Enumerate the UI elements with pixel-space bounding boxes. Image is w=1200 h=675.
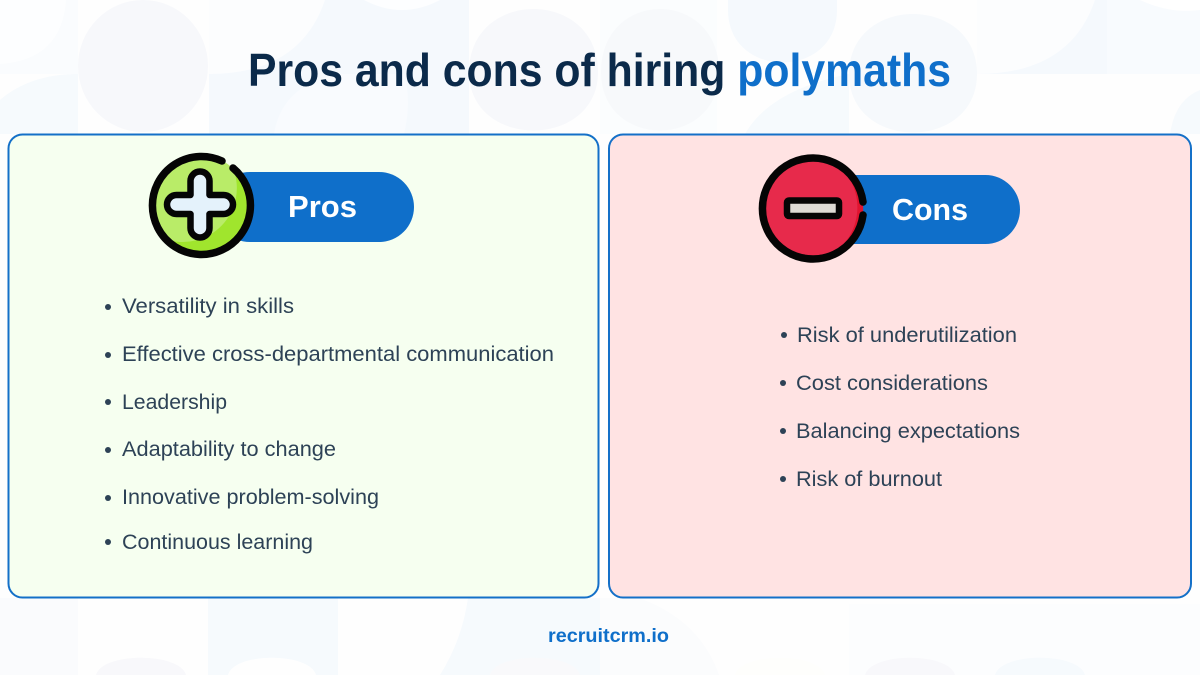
panel: pros [8, 134, 598, 598]
item: versatility: Versatility in skills [122, 294, 294, 318]
item: burnout: Risk of burnout [796, 467, 942, 491]
pros header badge [215, 172, 414, 242]
item: leadership: Leadership [122, 390, 227, 414]
pros header badge: Pros [288, 189, 357, 224]
pros list [105, 294, 554, 554]
item: innovation: Innovative problem-solving [122, 485, 379, 509]
cons list [780, 323, 1020, 491]
item: cost: Cost considerations [796, 371, 988, 395]
item: underutilization: Risk of underutilization [797, 323, 1017, 347]
title: Pros and cons of hiring polymaths [248, 44, 951, 96]
footer brand: recruitcrm.io [548, 626, 669, 647]
panel: cons [609, 134, 1191, 598]
icon: minus [762, 158, 863, 259]
item: learning: Continuous learning [122, 530, 313, 554]
cons header badge [820, 175, 1020, 244]
cons header badge: Cons [892, 192, 968, 227]
item: expectations: Balancing expectations [796, 419, 1020, 443]
item: adaptability: Adaptability to change [122, 437, 336, 461]
item: communication: Effective cross-departmental communication [122, 342, 554, 366]
icon: plus [151, 156, 250, 254]
